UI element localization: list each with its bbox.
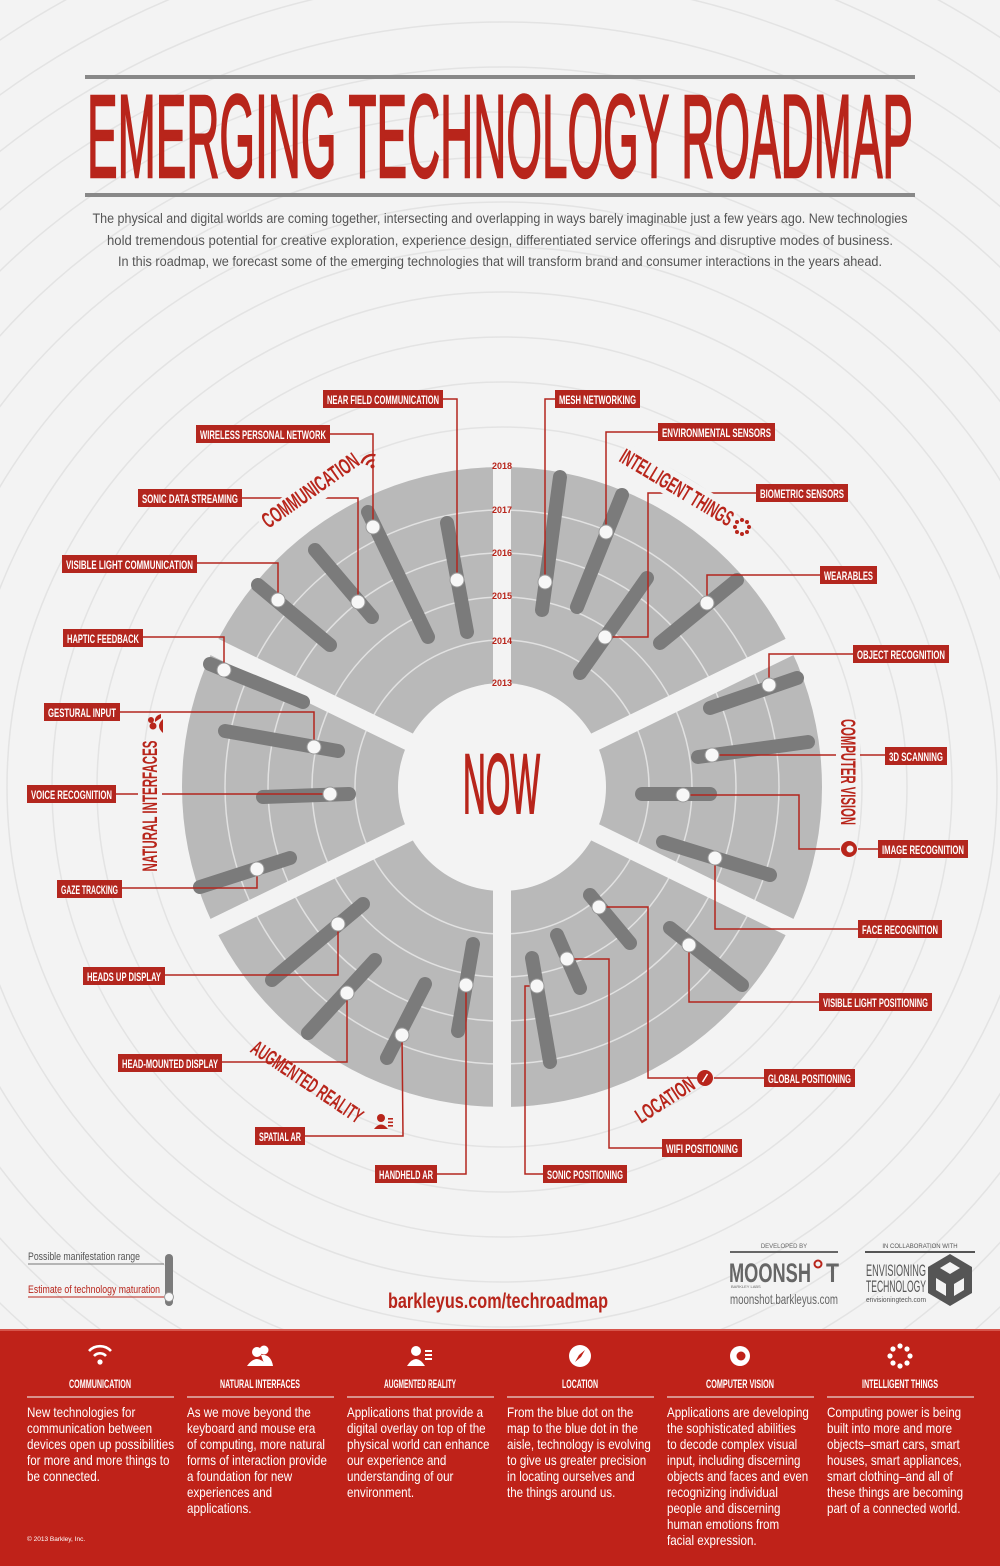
category: intelligent things: INTELLIGENT THINGS — [615, 444, 738, 531]
technology labels: WIRELESS PERSONAL NETWORK — [200, 428, 326, 442]
column text: intelligent things: objects–smart cars, smart — [827, 1437, 960, 1452]
year labels: 2014 — [492, 636, 512, 646]
category: natural interfaces — [138, 714, 163, 872]
year labels: 2015 — [492, 591, 512, 601]
logo: moonshot: MOONSH — [729, 1258, 811, 1288]
logo: moonshot: T — [826, 1258, 839, 1288]
technology labels: VISIBLE LIGHT COMMUNICATION — [66, 558, 193, 572]
column text: augmented reality: environment. — [347, 1485, 414, 1500]
footer band — [0, 1329, 1000, 1566]
category: communication: COMMUNICATION — [257, 448, 364, 533]
column text: augmented reality: physical world can enhance — [347, 1437, 489, 1452]
column text: augmented reality: Applications that provide a — [347, 1405, 483, 1420]
technology labels — [27, 390, 968, 1183]
column text: intelligent things: Computing power is being — [827, 1405, 961, 1420]
legend — [28, 1251, 174, 1302]
column text: computer vision: to decode complex visual — [667, 1437, 797, 1452]
copyright: © 2013 Barkley, Inc. — [27, 1535, 85, 1543]
column text: computer vision: people and discerning — [667, 1501, 781, 1516]
column text: intelligent things — [827, 1405, 963, 1516]
column text: communication: for more and more things to — [27, 1453, 169, 1468]
column text: augmented reality — [347, 1405, 489, 1500]
technology labels: WEARABLES — [824, 569, 873, 583]
column text: computer vision: recognizing individual — [667, 1485, 778, 1500]
roadmap wheel — [182, 440, 822, 1130]
category: computer vision: COMPUTER VISION — [836, 719, 859, 825]
maturation dots — [217, 520, 776, 1042]
column text: intelligent things: built into more and more — [827, 1421, 952, 1436]
year labels — [492, 461, 512, 688]
column text: computer vision: input, including discerning — [667, 1453, 800, 1468]
column text: natural interfaces: experiences and — [187, 1485, 272, 1500]
column text: computer vision — [667, 1405, 809, 1548]
column text: augmented reality: understanding of our — [347, 1469, 453, 1484]
column text: communication: communication between — [27, 1421, 152, 1436]
footer headings — [69, 1377, 938, 1391]
footer headings: LOCATION — [562, 1377, 598, 1391]
footer headings: COMMUNICATION — [69, 1377, 131, 1391]
range bars — [200, 477, 808, 1062]
technology labels: VOICE RECOGNITION — [31, 788, 112, 802]
technology labels: HEAD-MOUNTED DISPLAY — [122, 1057, 218, 1071]
technology labels: VISIBLE LIGHT POSITIONING — [823, 996, 928, 1010]
technology labels: HEADS UP DISPLAY — [87, 970, 161, 984]
column text: communication: devices open up possibilities — [27, 1437, 174, 1452]
logo: envisioning technology — [865, 1244, 975, 1306]
footer headings: INTELLIGENT THINGS — [862, 1377, 938, 1391]
column text: intelligent things: these things are becoming — [827, 1485, 963, 1500]
technology labels: GESTURAL INPUT — [48, 706, 116, 720]
logo: moonshot: BARKLEY LABS — [731, 1284, 761, 1289]
column text: computer vision: objects and faces and even — [667, 1469, 808, 1484]
technology labels: NEAR FIELD COMMUNICATION — [327, 393, 439, 407]
technology labels: MESH NETWORKING — [559, 393, 636, 407]
column text: natural interfaces: applications. — [187, 1501, 251, 1516]
column text: natural interfaces — [187, 1405, 327, 1516]
category: computer vision — [836, 719, 860, 857]
logo: envisioning technology: ENVISIONING — [866, 1261, 926, 1280]
column text: intelligent things: houses, smart appliances, — [827, 1453, 962, 1468]
logo: envisioning technology: TECHNOLOGY — [866, 1277, 926, 1296]
technology labels: SONIC DATA STREAMING — [142, 492, 238, 506]
intro text: The physical and digital worlds are coming together, intersecting and overlapping in ways barely imaginable just a few years ago. New technologies — [92, 211, 908, 226]
intro text: hold tremendous potential for creative exploration, experience design, differentiated service offerings and disruptive modes of business. — [107, 233, 893, 248]
category: intelligent things — [615, 442, 751, 536]
technology labels: GAZE TRACKING — [61, 883, 118, 897]
column text: augmented reality: our experience and — [347, 1453, 446, 1468]
column text: augmented reality: digital overlay on top of the — [347, 1421, 486, 1436]
intro text — [92, 211, 908, 269]
column text: location — [507, 1405, 651, 1500]
logo: moonshot: moonshot.barkleyus.com — [730, 1291, 838, 1307]
footer headings: COMPUTER VISION — [706, 1377, 774, 1391]
category: communication — [255, 447, 380, 538]
year labels: 2017 — [492, 505, 512, 515]
logo: envisioning technology: envisioningtech.com — [866, 1297, 926, 1304]
column text: intelligent things: part of a connected world. — [827, 1501, 960, 1516]
roadmap wheel: NOW — [463, 737, 540, 831]
column text: computer vision: human emotions from — [667, 1517, 779, 1532]
logo: envisioning technology: IN COLLABORATION WITH — [882, 1244, 958, 1250]
column text: natural interfaces: keyboard and mouse era — [187, 1421, 315, 1436]
legend: Possible manifestation range — [28, 1251, 140, 1263]
category: augmented reality — [246, 1037, 393, 1129]
technology labels: OBJECT RECOGNITION — [857, 648, 945, 662]
technology labels: FACE RECOGNITION — [862, 923, 938, 937]
technology labels: ENVIRONMENTAL SENSORS — [662, 426, 771, 440]
technology labels: SPATIAL AR — [259, 1130, 301, 1144]
category: location — [631, 1070, 713, 1128]
column text: location: aisle, technology is evolving — [507, 1437, 651, 1452]
url: barkleyus.com/techroadmap — [388, 1290, 608, 1313]
column text: location: in locating ourselves and — [507, 1469, 635, 1484]
column text: intelligent things: smart clothing–and all of — [827, 1469, 953, 1484]
footer headings: AUGMENTED REALITY — [384, 1377, 456, 1391]
column text: communication — [27, 1405, 174, 1484]
column text: location: map to the blue dot in the — [507, 1421, 638, 1436]
column text: communication: be connected. — [27, 1469, 100, 1484]
footer icons — [89, 1343, 913, 1369]
technology labels: HANDHELD AR — [379, 1168, 433, 1182]
category: location: LOCATION — [631, 1073, 699, 1128]
column text: natural interfaces: As we move beyond the — [187, 1405, 311, 1420]
column text: location: From the blue dot on the — [507, 1405, 633, 1420]
logo: moonshot: DEVELOPED BY — [761, 1244, 807, 1250]
technology labels: SONIC POSITIONING — [547, 1168, 623, 1182]
column text: location: to give us greater precision — [507, 1453, 646, 1468]
category: augmented reality: AUGMENTED REALITY — [246, 1037, 367, 1128]
technology labels: WIFI POSITIONING — [666, 1142, 738, 1156]
leader lines — [116, 399, 885, 1174]
category: natural interfaces: NATURAL INTERFACES — [139, 740, 162, 872]
year labels: 2013 — [492, 678, 512, 688]
legend: Estimate of technology maturation — [28, 1284, 160, 1296]
logo: moonshot — [729, 1244, 839, 1307]
column text: natural interfaces: forms of interaction provide — [187, 1453, 327, 1468]
technology labels: HAPTIC FEEDBACK — [67, 632, 139, 646]
column text: location: the things around us. — [507, 1485, 615, 1500]
column text: computer vision: facial expression. — [667, 1533, 757, 1548]
column text: natural interfaces: of computing, more natural — [187, 1437, 325, 1452]
column text: communication: New technologies for — [27, 1405, 135, 1420]
technology labels: 3D SCANNING — [889, 750, 943, 764]
column text: computer vision: the sophisticated abilities — [667, 1421, 796, 1436]
year labels: 2018 — [492, 461, 512, 471]
technology labels: GLOBAL POSITIONING — [768, 1072, 851, 1086]
column text: computer vision: Applications are developing — [667, 1405, 809, 1420]
footer headings: NATURAL INTERFACES — [220, 1377, 300, 1391]
column text: natural interfaces: a foundation for new — [187, 1469, 293, 1484]
year labels: 2016 — [492, 548, 512, 558]
intro text: In this roadmap, we forecast some of the emerging technologies that will transform brand and consumer interactions in the years ahead. — [118, 254, 882, 269]
technology labels: BIOMETRIC SENSORS — [760, 487, 844, 501]
